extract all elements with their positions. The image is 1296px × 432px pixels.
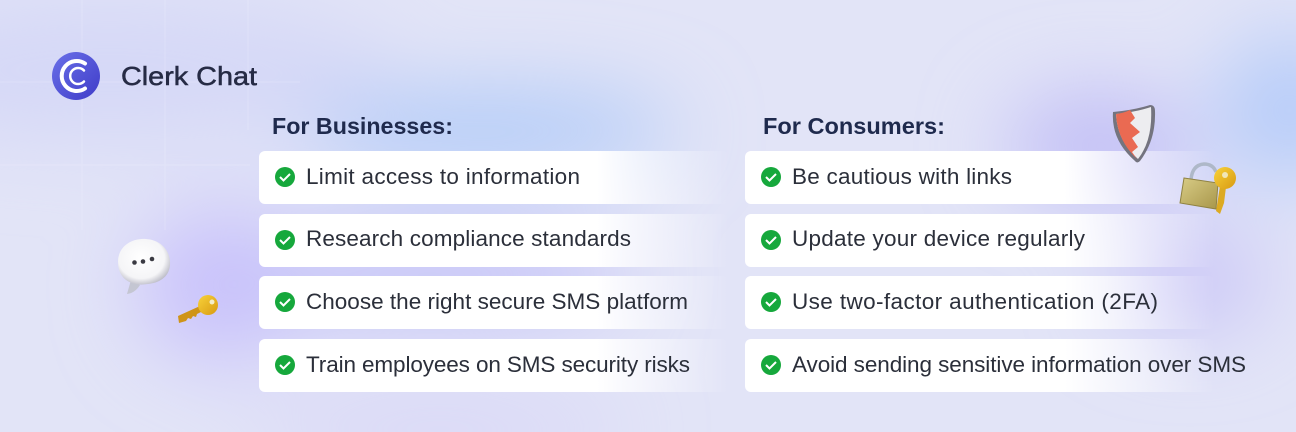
heading: for businesses: For Businesses: [272, 113, 453, 139]
item: train employees [259, 339, 729, 392]
logo: Clerk Chat [52, 52, 258, 100]
item: update device [745, 214, 1215, 267]
item: two-factor: Use two-factor authentication (2FA) [792, 289, 1158, 314]
item: avoid sensitive: Avoid sending sensitive information over SMS [792, 352, 1246, 377]
item: two-factor [745, 276, 1215, 329]
icon: logo mark [52, 52, 100, 100]
item: cautious with links [745, 151, 1215, 204]
item: train employees: Train employees on SMS security risks [306, 352, 690, 377]
item: research compliance: Research compliance standards [306, 226, 631, 251]
panel: for businesses [259, 113, 729, 392]
item: choose platform [259, 276, 729, 329]
item: research compliance [259, 214, 729, 267]
brand name: Clerk Chat [121, 61, 258, 91]
item: limit access [259, 151, 729, 204]
icon: speech bubble [118, 239, 170, 294]
item: choose platform: Choose the right secure SMS platform [306, 289, 688, 314]
item: cautious with links: Be cautious with links [792, 164, 1012, 189]
panel: for consumers [745, 113, 1246, 392]
item: limit access: Limit access to information [306, 164, 580, 189]
item: update device: Update your device regularly [792, 226, 1086, 251]
item: avoid sensitive [745, 339, 1246, 392]
icon: shield [1113, 105, 1155, 162]
heading: for consumers: For Consumers: [763, 113, 945, 139]
icon: small key [178, 295, 218, 323]
icon: padlock and key [1180, 164, 1236, 214]
